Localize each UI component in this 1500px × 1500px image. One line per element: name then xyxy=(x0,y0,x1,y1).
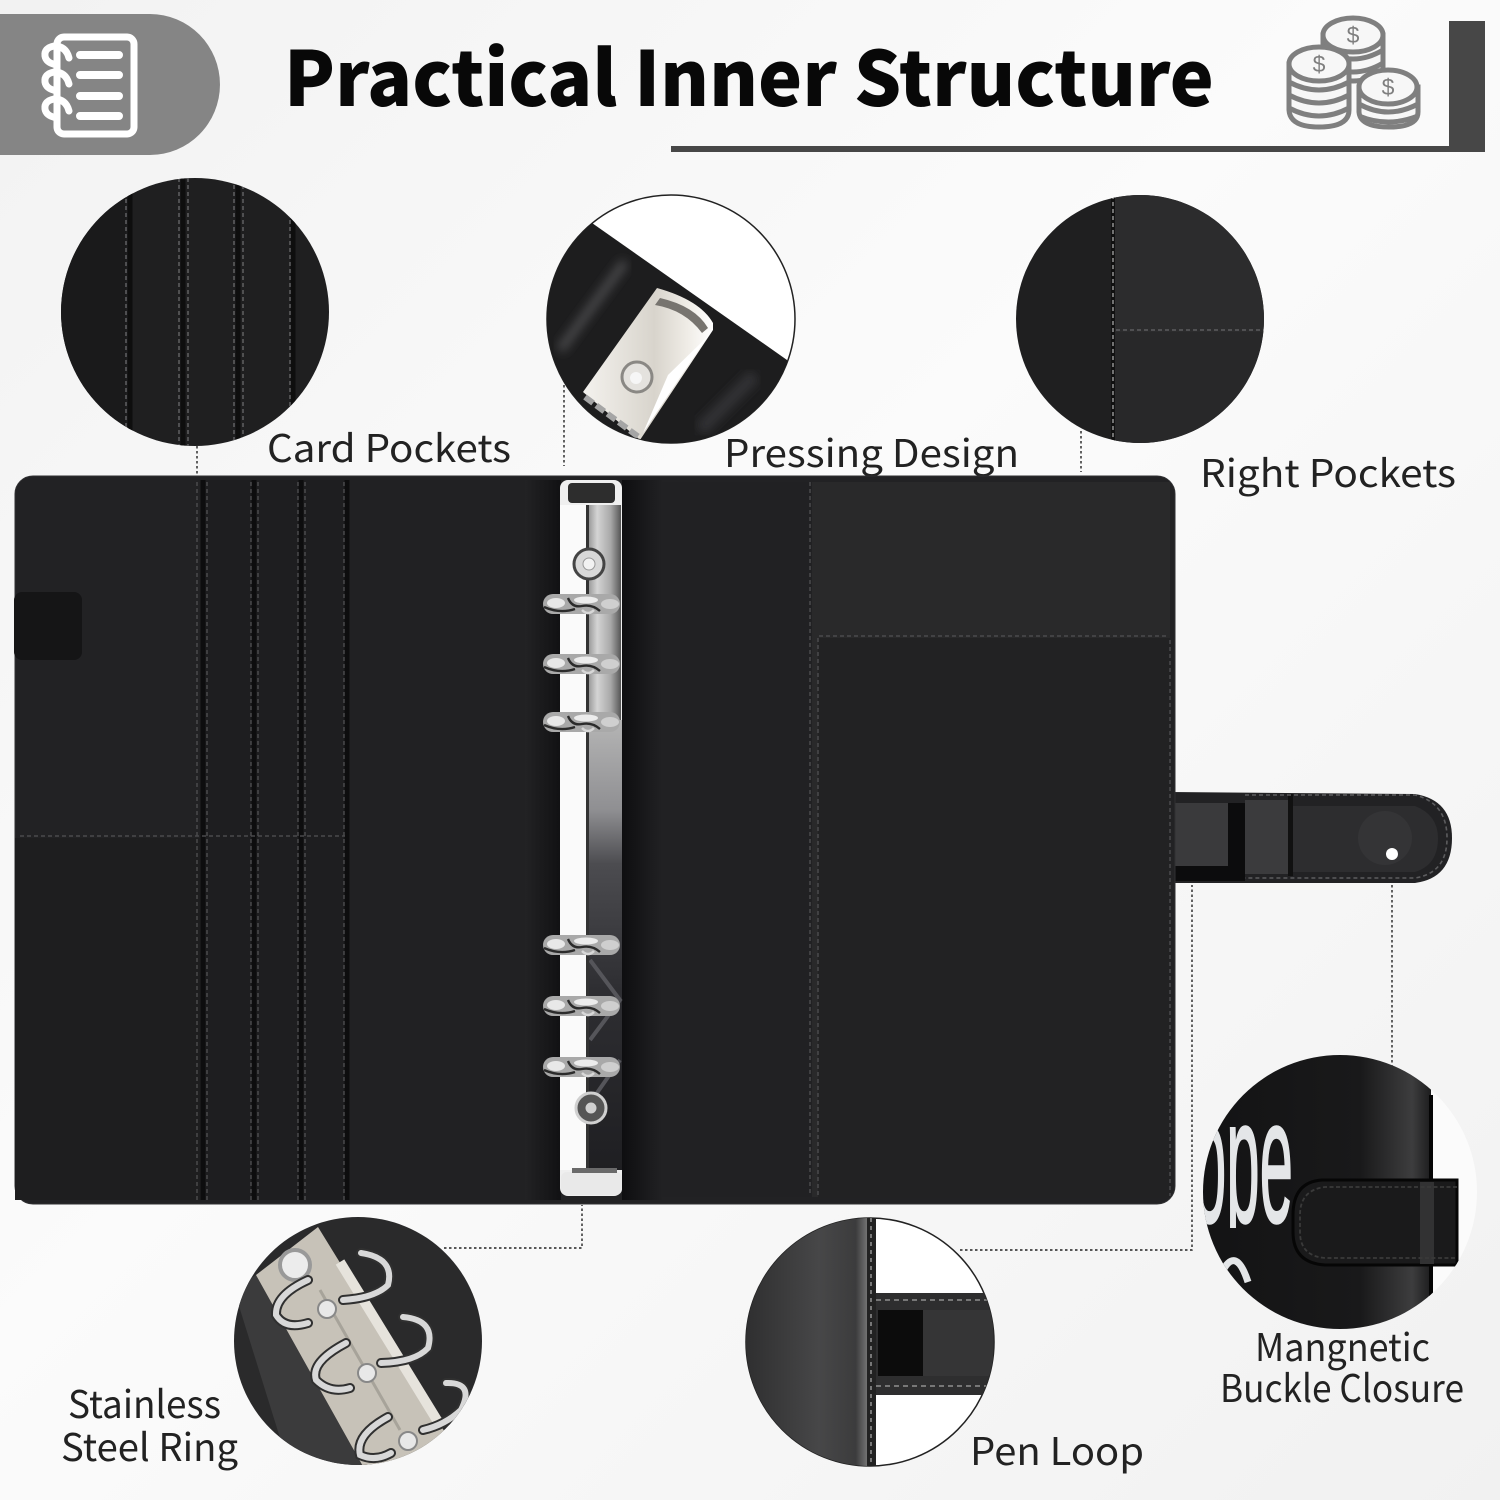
label: magnetic buckle closure: Buckle Closure xyxy=(1220,1358,1464,1413)
leader lines xyxy=(197,385,1392,1250)
magnetic strap xyxy=(1170,792,1452,883)
label: magnetic buckle closure: Mangnetic xyxy=(1255,1317,1430,1372)
icon: dollar signs: $ xyxy=(1313,51,1326,77)
central panel xyxy=(350,480,525,1200)
detail circle: magnetic buckle: ope xyxy=(1193,1061,1293,1260)
icon: coin stacks xyxy=(1289,18,1418,127)
detail circle: card pockets xyxy=(60,178,332,448)
title: Practical Inner Structure xyxy=(284,18,1214,128)
detail circle: stainless steel ring xyxy=(234,1217,484,1470)
binder xyxy=(14,476,1452,1204)
label: stainless steel ring xyxy=(61,1374,238,1472)
detail circle: pen loop xyxy=(746,1218,996,1468)
label: right pockets: Right Pockets xyxy=(1200,443,1456,498)
right panel pocket xyxy=(662,482,1170,1198)
icon: spiral notebook list xyxy=(45,37,134,134)
icon: dollar signs: $ xyxy=(1382,74,1395,100)
label: pen loop: Pen Loop xyxy=(970,1421,1144,1476)
spine shadows xyxy=(525,480,662,1200)
detail circle: pressing design xyxy=(540,195,795,450)
icon: dollar signs: $ xyxy=(1347,22,1360,48)
icon: dollar signs xyxy=(1313,22,1395,100)
label: stainless steel ring: Steel Ring xyxy=(61,1417,238,1472)
binder rings xyxy=(543,594,620,1077)
detail circle: right pockets xyxy=(1016,195,1266,445)
binder body xyxy=(15,476,1175,1204)
card slots left xyxy=(15,480,348,1200)
label: card pockets: Card Pockets xyxy=(267,418,511,473)
label: pressing design: Pressing Design xyxy=(724,423,1019,478)
header badge with notebook icon xyxy=(0,14,220,155)
label: magnetic buckle closure xyxy=(1220,1317,1464,1413)
metal spine xyxy=(560,480,622,1196)
header corner rule xyxy=(671,21,1485,152)
left pen strap xyxy=(14,592,82,660)
label: stainless steel ring: Stainless xyxy=(68,1374,221,1429)
